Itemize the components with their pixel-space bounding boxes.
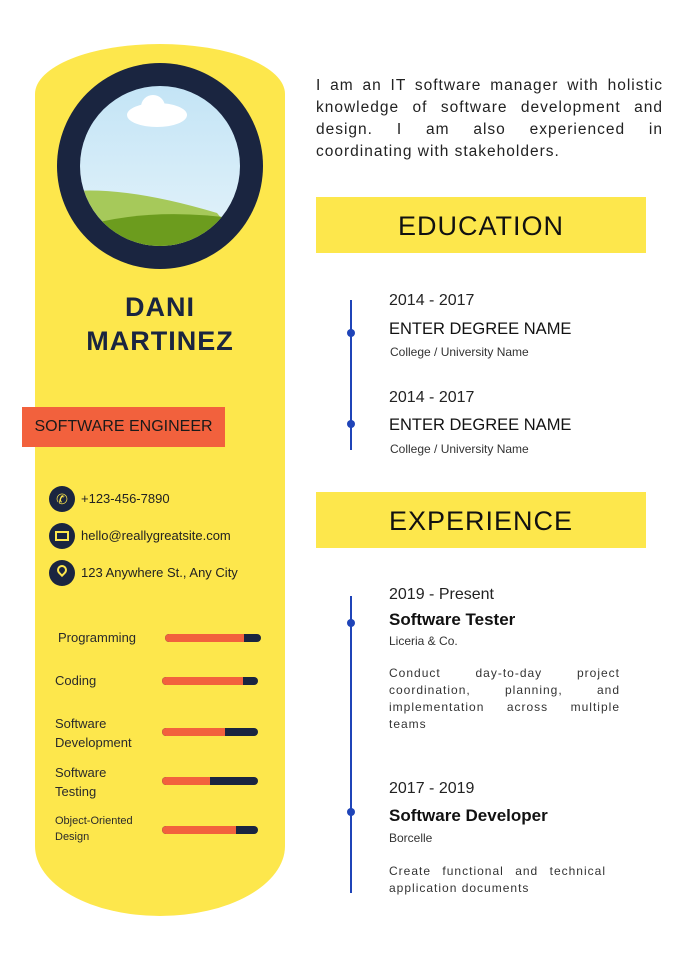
skills chart: Development <box>55 735 132 750</box>
contact info: +123-456-7890 <box>81 491 170 506</box>
skills chart: Testing <box>55 784 96 799</box>
name heading <box>86 292 234 356</box>
contact info: 123 Anywhere St., Any City <box>81 565 238 580</box>
experience timeline <box>347 586 620 895</box>
heading: education <box>316 197 646 253</box>
skills chart: Design <box>55 831 89 843</box>
experience timeline: Borcelle <box>389 831 432 845</box>
job title label: SOFTWARE ENGINEER <box>34 418 213 435</box>
icon: phone: ✆ <box>56 491 68 507</box>
experience timeline: Software Tester <box>389 610 515 629</box>
icon: phone <box>49 486 75 512</box>
contact info: hello@reallygreatsite.com <box>81 528 231 543</box>
icon: email <box>49 523 75 549</box>
education timeline: College / University Name <box>390 345 529 359</box>
experience timeline: Liceria & Co. <box>389 634 458 648</box>
icon: location <box>49 560 75 586</box>
name heading: DANI <box>125 292 195 322</box>
profile text: I am an IT software manager with holistic knowledge of software development and design. I am also experienced in coordinating with stakeholders. <box>316 77 663 160</box>
education timeline: ENTER DEGREE NAME <box>389 416 571 434</box>
skills chart: Software <box>55 716 106 731</box>
experience timeline: Conduct day-to-day project coordination, planning, and implementation across multiple teams <box>389 666 620 731</box>
name heading: MARTINEZ <box>86 326 234 356</box>
experience timeline: Software Developer <box>389 806 548 825</box>
skills chart: Coding <box>55 673 96 688</box>
skills chart <box>55 630 261 843</box>
photo placeholder <box>57 63 263 269</box>
education timeline <box>347 292 571 456</box>
education timeline: College / University Name <box>390 442 529 456</box>
experience timeline: 2019 - Present <box>389 586 494 603</box>
education timeline: ENTER DEGREE NAME <box>389 320 571 338</box>
heading: experience <box>316 492 646 548</box>
skills chart: Programming <box>58 630 136 645</box>
skills chart: Software <box>55 765 106 780</box>
contact info <box>49 486 238 586</box>
education timeline: 2014 - 2017 <box>389 389 474 406</box>
heading: education: EDUCATION <box>398 211 564 241</box>
experience timeline: Create functional and technical application documents <box>389 864 606 895</box>
experience timeline: 2017 - 2019 <box>389 780 474 797</box>
job title label <box>22 407 225 447</box>
skills chart: Object-Oriented <box>55 815 133 827</box>
heading: experience: EXPERIENCE <box>389 506 573 536</box>
education timeline: 2014 - 2017 <box>389 292 474 309</box>
panel: yellow sidebar <box>35 44 285 916</box>
